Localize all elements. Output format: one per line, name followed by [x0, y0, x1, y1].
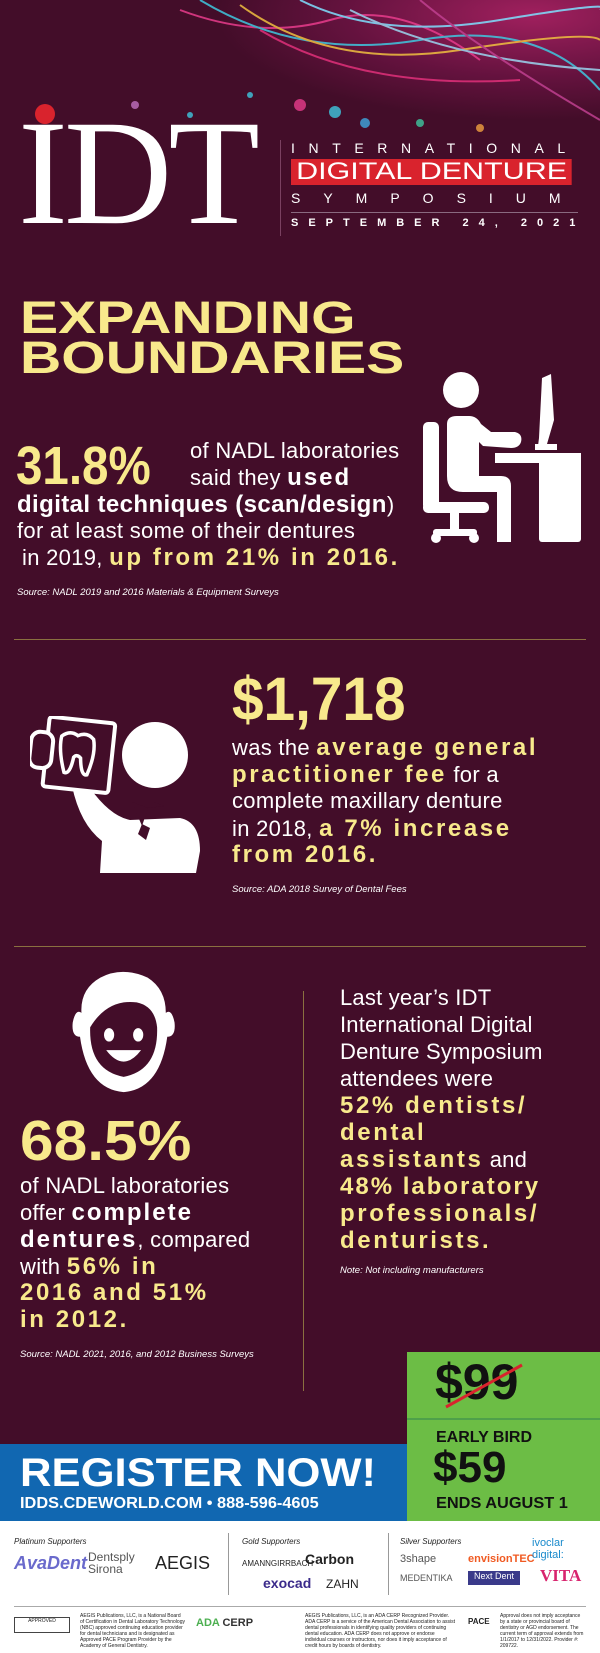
logo: symposium title: SYMPOSIUM [291, 190, 584, 206]
text: attendees: dental [340, 1119, 426, 1146]
source: NADL surveys: Source: NADL 2019 and 2016 Materials & Equipment Surveys [17, 587, 279, 598]
footer: supporters: envisionTEC [468, 1553, 535, 1565]
footer: supporters: Carbon [305, 1551, 354, 1567]
heading: expanding boundaries: EXPANDING [20, 292, 356, 343]
icon: smiling face [72, 972, 175, 1092]
stat: $1,718: from 2016. [232, 841, 378, 868]
stat: 68.5% [20, 1109, 250, 1333]
icon: person at computer [423, 372, 581, 543]
heading: expanding boundaries: BOUNDARIES [20, 332, 404, 383]
note: Note: Not including manufacturers [340, 1265, 484, 1276]
footer: supporters: exocad [263, 1575, 311, 1591]
stat: 68.5%: in 2012. [20, 1306, 129, 1333]
footer: supporters: VITA [540, 1566, 581, 1585]
footer: supporters: MEDENTIKA [400, 1573, 453, 1583]
panel: early bird price [407, 1352, 600, 1521]
footer: supporters: AvaDent [14, 1553, 87, 1573]
text: attendees: denturists. [340, 1227, 491, 1254]
footer: supporters: PACE [468, 1617, 490, 1626]
panel: early bird price: EARLY BIRD [436, 1429, 532, 1446]
panel: early bird price: $99 [435, 1354, 518, 1410]
stat: $1,718: practitioner fee for a [232, 761, 499, 788]
logo: symposium title [280, 140, 585, 236]
text: attendees [340, 985, 543, 1254]
stat: 31.8%: for at least some of their dentures [17, 518, 355, 543]
stat: 68.5%: of NADL laboratories [20, 1173, 229, 1198]
text: attendees: Last year’s IDT [340, 985, 491, 1010]
source: NADL business surveys: Source: NADL 2021, 2016, and 2012 Business Surveys [20, 1349, 254, 1360]
banner: register now: IDDS.CDEWORLD.COM • 888-596-4605 [20, 1495, 319, 1512]
stat: 31.8%: in 2019, up from 21% in 2016. [22, 544, 400, 571]
footer: supporters: ADA CERP [196, 1617, 253, 1629]
footer: supporters: ivoclar [532, 1537, 564, 1549]
footer: supporters: ZAHN [326, 1577, 359, 1591]
stat: 68.5%: offer complete [20, 1199, 193, 1226]
stat: 68.5%: with 56% in [20, 1253, 158, 1280]
footer: supporters: AEGIS Publications, LLC, is a National Board of Certification in Dental Laboratory Technology (NBC) approved continuing education provider for dental technicians and is designated as Approved PACE Program Provider by the Academy of General Dentistry. [80, 1613, 185, 1649]
footer: supporters: Approval does not imply acceptance by a state or provincial board of dentistry or AGD endorsement. The current term of approval extends from 1/1/2017 to 12/31/2022. Provider #: 209722. [500, 1613, 583, 1649]
text: attendees: International Digital [340, 1012, 533, 1037]
footer: supporters: AMANNGIRRBACH [242, 1559, 313, 1568]
stat: $1,718: $1,718 [232, 665, 406, 733]
stat: 31.8% [16, 436, 400, 571]
footer: supporters: Platinum Supporters [14, 1537, 86, 1546]
text: attendees: assistants and [340, 1146, 527, 1173]
footer: supporters: Sirona [88, 1562, 123, 1576]
logo: symposium title: INTERNATIONAL [291, 140, 579, 156]
text: attendees: attendees were [340, 1066, 493, 1091]
footer: supporters: Silver Supporters [400, 1537, 461, 1546]
footer: supporters: Dentsply [88, 1550, 135, 1564]
stat: 31.8%: 31.8% [16, 436, 151, 496]
source: ADA: Source: ADA 2018 Survey of Dental Fees [232, 884, 407, 895]
text: attendees: professionals/ [340, 1200, 539, 1227]
icon: dentist with x-ray [30, 716, 200, 873]
stat: 31.8%: of NADL laboratories [190, 438, 399, 463]
panel: early bird price: $59 [433, 1443, 506, 1492]
stat: 68.5%: 68.5% [20, 1109, 191, 1173]
header artwork [131, 0, 600, 132]
logo: symposium title: SEPTEMBER 24, 2021 [291, 217, 585, 229]
footer: supporters: APPROVED [28, 1618, 56, 1624]
text: attendees: Denture Symposium [340, 1039, 543, 1064]
logo: symposium title: DIGITAL DENTURE [296, 158, 567, 185]
banner: register now [0, 1444, 407, 1521]
stat: 68.5%: 2016 and 51% [20, 1279, 209, 1306]
footer: supporters: digital: [532, 1549, 564, 1561]
stat: 31.8%: digital techniques (scan/design) [17, 491, 394, 518]
footer: supporters: Next Dent [474, 1571, 514, 1581]
banner: register now: REGISTER NOW! [20, 1451, 376, 1495]
footer: supporters [0, 1521, 600, 1653]
footer: supporters: Gold Supporters [242, 1537, 300, 1546]
stat: 68.5%: dentures, compared [20, 1226, 250, 1253]
footer: supporters: AEGIS Publications, LLC, is an ADA CERP Recognized Provider. ADA CERP is a service of the American Dental Association to assist dental professionals in identifying quality providers of continuing dental education. ADA CERP does not approve or endorse individual courses or instructors, nor does it imply acceptance of credit hours by boards of dentistry. [305, 1613, 455, 1649]
logo: IDT: IDT [18, 90, 256, 256]
text: attendees: 48% laboratory [340, 1173, 540, 1200]
stat: $1,718 [232, 665, 538, 868]
panel: early bird price: ENDS AUGUST 1 [436, 1495, 568, 1512]
footer: supporters: 3shape [400, 1553, 436, 1565]
stat: $1,718: was the average general [232, 734, 538, 761]
heading: expanding boundaries [20, 292, 404, 383]
text: attendees: 52% dentists/ [340, 1092, 527, 1119]
stat: $1,718: in 2018, a 7% increase [232, 815, 512, 842]
stat: 31.8%: said they used [190, 464, 351, 491]
stat: $1,718: complete maxillary denture [232, 788, 503, 813]
footer: supporters: AEGIS [155, 1553, 210, 1573]
